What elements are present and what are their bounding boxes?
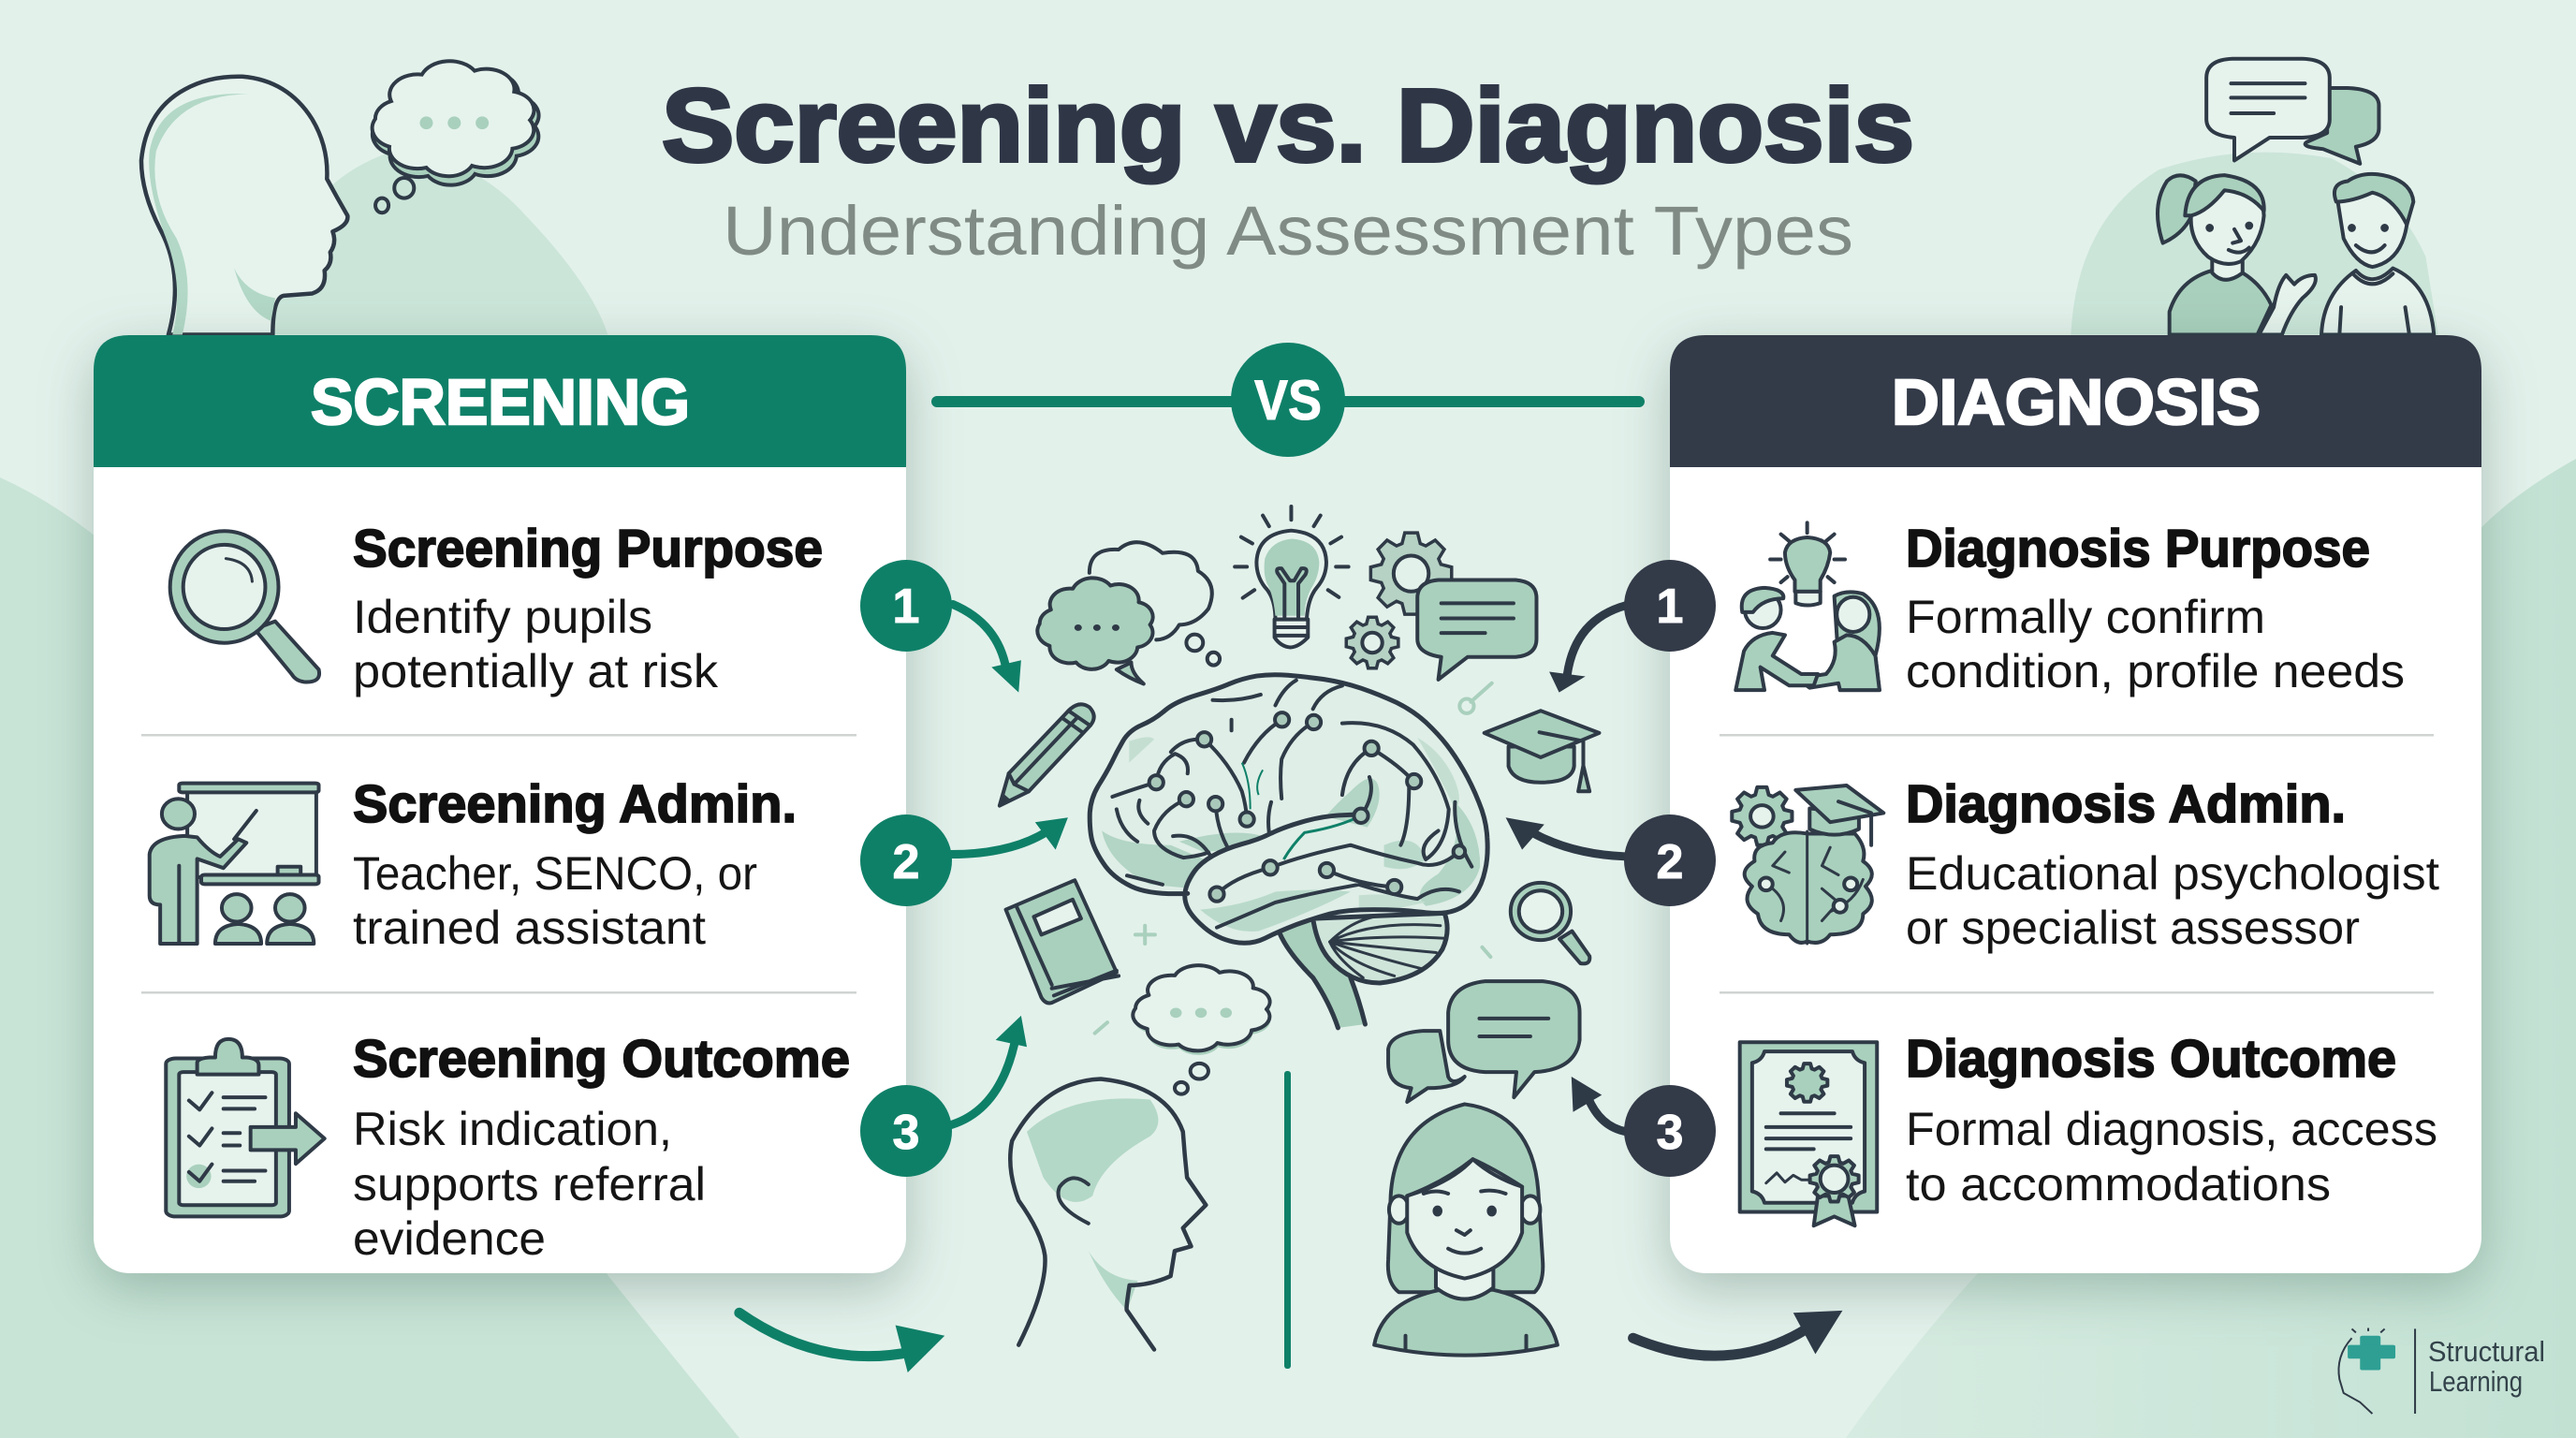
icon: light bulb [1235,494,1349,647]
arrow: bottom left [739,1313,944,1372]
icon: floating idea icons around brain [1000,494,1599,1055]
arrow: bottom right [1633,1311,1842,1356]
icon: thought clouds [1037,542,1220,683]
row: diagnosis purpose: condition, profile needs [1906,645,2405,697]
row: screening outcome [353,1029,850,1265]
panel: screening [94,335,906,1273]
icon: magnifying glass [170,531,319,682]
icon: student head profile [1010,1064,1208,1349]
number badges: diagnosis [1624,560,1716,1177]
icon: pencil [1000,704,1094,806]
row: diagnosis purpose: Diagnosis Purpose [1906,519,2370,579]
icon: bottom thought cloud [1133,965,1270,1055]
row: diagnosis purpose: Formally confirm [1906,591,2265,643]
number badges: screening [860,560,952,1177]
row: screening admin: trained assistant [353,902,706,954]
row: diagnosis admin: Educational psychologist [1906,847,2439,900]
icon: student girl with speech bubbles [1374,981,1580,1356]
logo: structural learning: Structural [2428,1335,2545,1368]
row: diagnosis admin: Diagnosis Admin. [1906,774,2346,834]
arrow: diagnosis 3 [1572,1077,1627,1132]
row: diagnosis outcome [1906,1029,2437,1211]
icon: clipboard checklist with arrow [166,1039,325,1216]
heading: diagnosis: DIAGNOSIS [1892,366,2261,438]
arrow: screening 1 [953,605,1021,693]
logo: structural learning [2338,1328,2545,1414]
row: diagnosis admin: or specialist assessor [1906,902,2360,954]
subtitle: Understanding Assessment Types [723,192,1853,270]
arrow: diagnosis 2 [1506,817,1627,857]
icon: gears [1346,533,1452,668]
icon: speech bubble [1417,580,1536,680]
icon: certificate with seal [1740,1042,1877,1225]
number badges: screening: 2 [893,835,919,889]
panel: diagnosis [1670,335,2481,1273]
arrows from diagnosis numbers [1506,606,1842,1356]
icon: graduation cap [1485,711,1599,791]
title: Screening vs. Diagnosis [662,68,1914,183]
row: screening outcome: evidence [353,1212,546,1265]
number badges: diagnosis: 3 [1657,1106,1683,1160]
row: screening purpose: Screening Purpose [353,519,823,579]
heading: screening: SCREENING [311,366,690,438]
row: screening purpose: potentially at risk [353,645,719,697]
vs connector [931,343,1645,457]
icon: book [1006,880,1119,1003]
row: diagnosis outcome: Diagnosis Outcome [1906,1029,2396,1089]
icon: teacher at board [150,784,319,944]
row: screening admin: Teacher, SENCO, or [353,847,757,900]
row: screening purpose [353,519,823,697]
arrow: diagnosis 1 [1549,606,1627,693]
icon: two people talking with speech bubbles [2158,59,2434,335]
number badges: screening: 1 [893,580,919,634]
number badges: screening: 3 [893,1106,919,1160]
row: screening purpose: Identify pupils [353,591,652,643]
row: screening outcome: Screening Outcome [353,1029,850,1089]
row: screening outcome: supports referral [353,1158,706,1211]
logo: structural learning: Learning [2429,1365,2523,1398]
number badges: diagnosis: 2 [1657,835,1683,889]
icon: central brain [1090,675,1487,1028]
icon: center divider line [1284,1071,1291,1369]
icon: small decorative key and plus marks [1095,683,1492,1034]
vs connector: VS [1254,369,1322,432]
row: diagnosis outcome: to accommodations [1906,1158,2331,1211]
arrow: screening 3 [951,1016,1027,1124]
icon: handshake with lightbulb [1735,522,1880,690]
row: diagnosis outcome: Formal diagnosis, access [1906,1103,2437,1155]
arrows from screening numbers [739,605,1068,1372]
row: screening admin [353,774,797,954]
arrow: screening 2 [951,817,1068,854]
icon: small magnifier [1511,883,1589,963]
row: screening outcome: Risk indication, [353,1103,672,1155]
row: screening admin: Screening Admin. [353,774,797,834]
row: diagnosis purpose [1906,519,2405,697]
number badges: diagnosis: 1 [1657,580,1683,634]
icon: brain with gear and graduation cap [1732,785,1883,944]
row: diagnosis admin [1906,774,2439,954]
icon: thinking head with thought cloud [141,61,539,335]
